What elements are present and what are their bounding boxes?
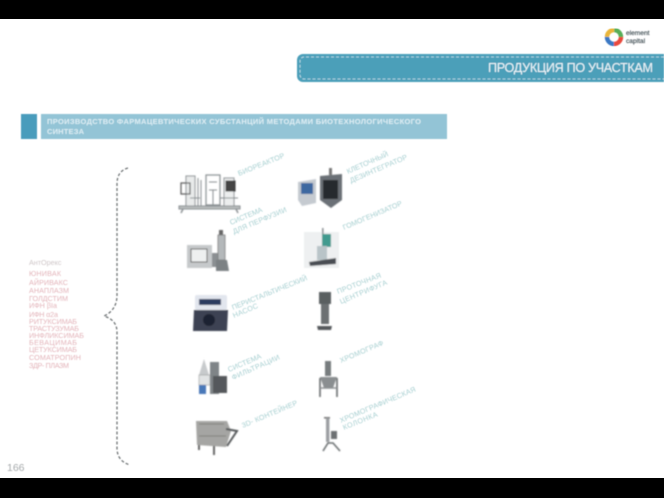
section heading bar	[21, 114, 447, 139]
label: chromatography column: ХРОМОГРАФИЧЕСКАЯ	[338, 385, 417, 425]
header banner	[297, 54, 664, 82]
label: cell disintegrator: ДЕЗИНТЕГРАТОР	[348, 152, 409, 185]
product list: АНАПЛАЗМ	[29, 286, 69, 295]
product list: ТРАСТУЗУМАБ	[29, 324, 79, 333]
product list: ГОЛДСТИМ	[29, 294, 68, 303]
label: filtration system: ФИЛЬТРАЦИИ	[230, 352, 281, 382]
equipment: filtration system	[199, 359, 227, 394]
equipment: peristaltic pump	[193, 295, 228, 331]
label: cell disintegrator: КЛЕТОЧНЫЙ	[345, 149, 390, 176]
label: peristaltic pump: НАСОС	[231, 301, 260, 320]
product list: АЙРИВАКС	[29, 278, 68, 287]
page number: 166	[7, 462, 25, 474]
label: perfusion system: ДЛЯ ПЕРФУЗИИ	[231, 205, 288, 236]
product list: ЦЕТУКСИМАБ	[29, 345, 77, 354]
equipment: homogenizer	[304, 228, 339, 268]
label: filtration system: СИСТЕМА	[226, 351, 263, 374]
label: flow centrifuge: ПРОТОЧНАЯ	[335, 271, 383, 296]
product list: БЕВАЦИМАБ	[29, 338, 77, 347]
banner title: ПРОДУКЦИЯ ПО УЧАСТКАМ	[488, 61, 653, 75]
product list: ИФН βІа	[29, 301, 57, 310]
logo: element capital	[607, 30, 650, 45]
section heading text: СИНТЕЗА	[47, 127, 85, 136]
label: perfusion system: СИСТЕМА	[228, 205, 264, 227]
equipment: bioreactor	[179, 175, 240, 213]
label: chromatograph: ХРОМОГРАФ	[338, 338, 385, 365]
product list: СОМАТРОПИН	[29, 353, 81, 362]
curly bracket	[104, 168, 130, 465]
equipment: perfusion system	[187, 230, 229, 271]
label: 3D container: 3D- КОНТЕЙНЕР	[240, 398, 299, 430]
product list: АнтОрекс	[29, 258, 62, 267]
product list: ЗДР- ПЛАЗМ	[29, 361, 69, 370]
equipment: flow centrifuge	[317, 292, 332, 330]
label: homogenizer: ГОМОГЕНИЗАТОР	[341, 199, 404, 232]
product list	[29, 258, 84, 370]
label: chromatography column: КОЛОНКА	[341, 410, 379, 432]
logo: element capital: capital	[626, 38, 646, 45]
label: bioreactor: БИОРЕАКТОР	[236, 151, 286, 178]
label: peristaltic pump: ПЕРИСТАЛЬТИЧЕСКИЙ	[230, 273, 309, 312]
section heading text: ПРОИЗВОДСТВО ФАРМАЦЕВТИЧЕСКИХ СУБСТАНЦИЙ МЕТОДАМИ БИОТЕХНОЛОГИЧЕСКОГО	[47, 117, 421, 126]
product list: ИФН α2а	[29, 310, 58, 319]
product list: ИНФЛИКСИМАБ	[29, 331, 84, 340]
equipment: chromatograph	[320, 361, 337, 397]
product list: ЮНИВАК	[29, 269, 62, 278]
equipment: 3D container	[196, 421, 237, 455]
label: flow centrifuge: ЦЕНТРИФУГА	[338, 278, 389, 306]
logo: element capital: element	[626, 30, 650, 37]
equipment: cell disintegrator	[298, 168, 342, 208]
equipment: chromatography column	[323, 417, 340, 451]
product list: РИТУКСИМАБ	[29, 317, 77, 326]
